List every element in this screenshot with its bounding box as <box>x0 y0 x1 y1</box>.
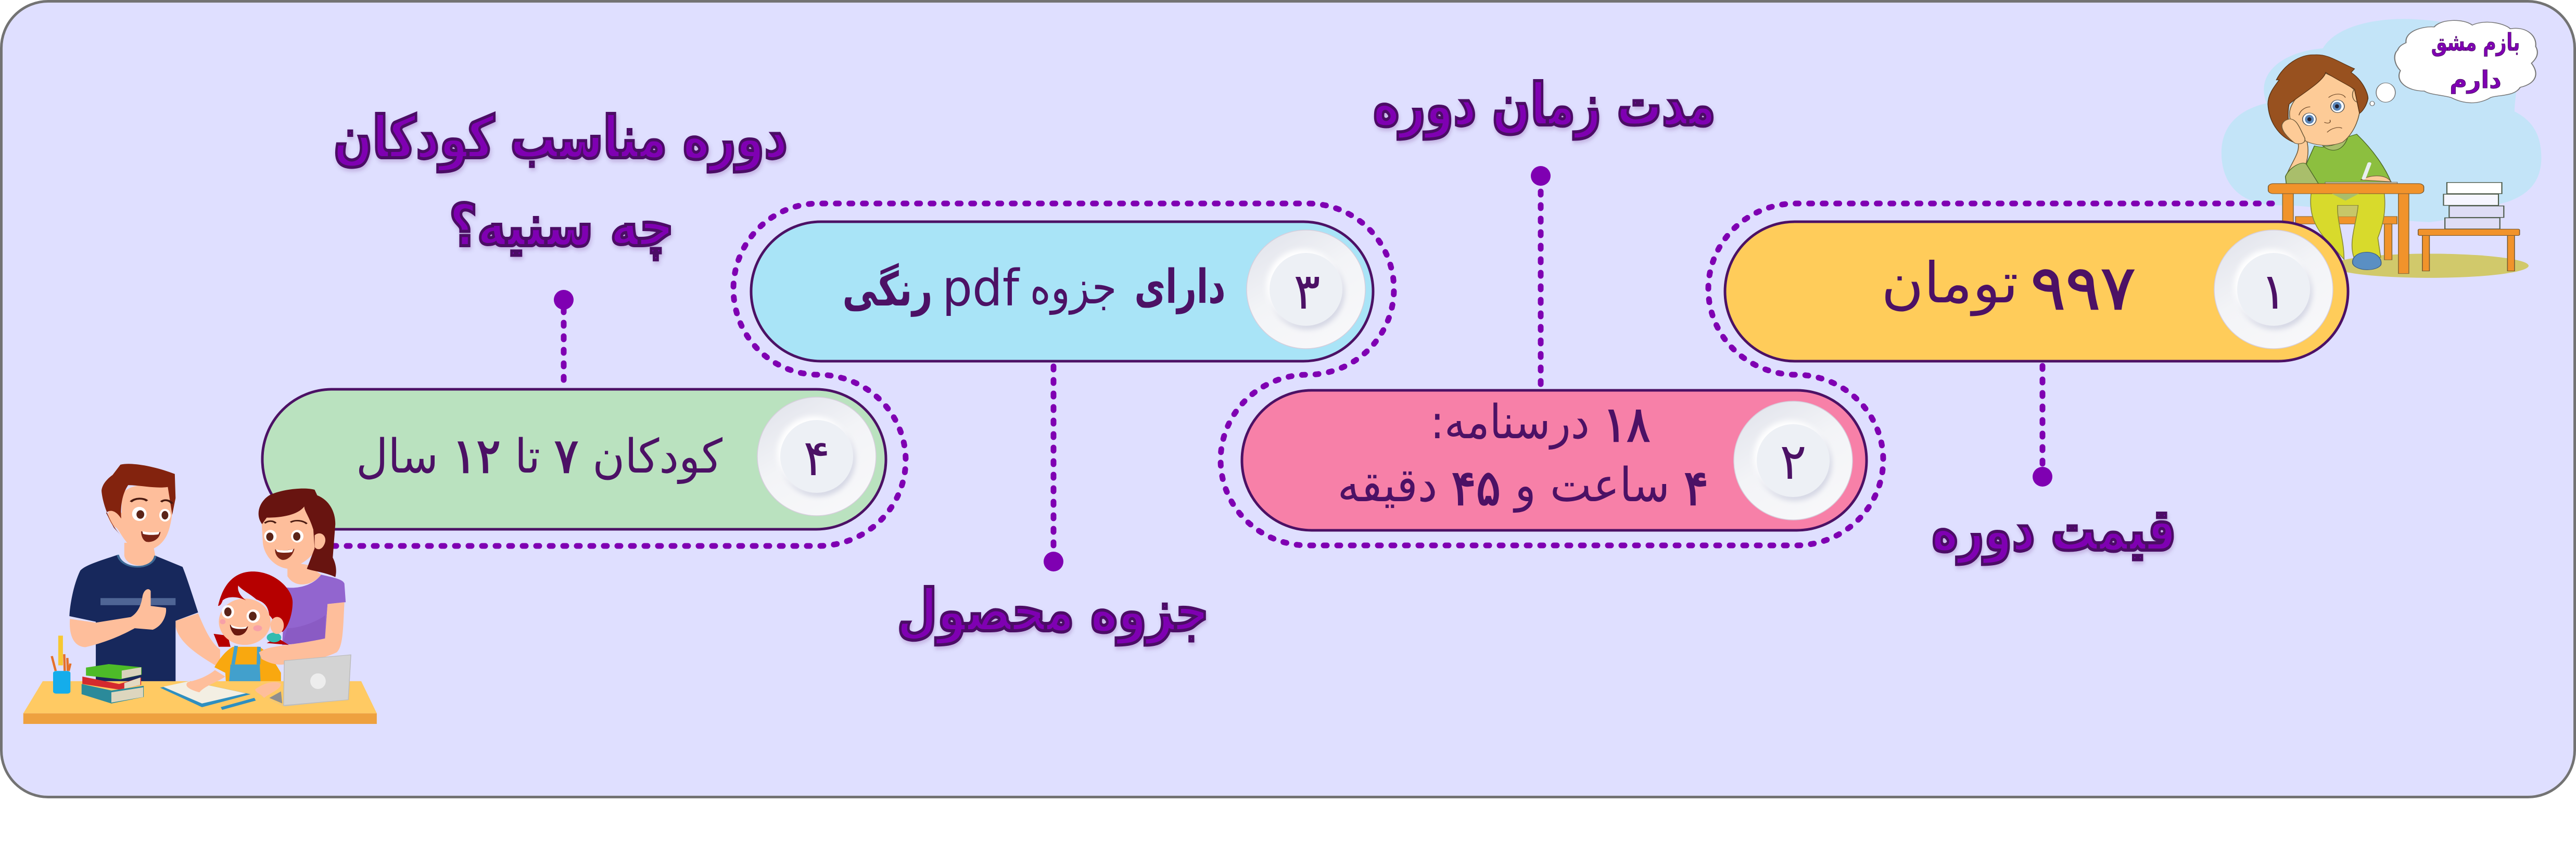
girl overalls <box>229 665 260 681</box>
heading: duration: مدت زمان دوره <box>1373 71 1716 139</box>
ground shadow <box>2331 253 2529 278</box>
paper <box>2325 182 2397 184</box>
girl hand on table <box>255 682 281 698</box>
duration text: ۴ <box>1684 459 1708 517</box>
price unit: تومان <box>1881 250 2019 316</box>
age text: کودکان ۷ تا ۱۲ سال <box>356 429 722 485</box>
connector: pill 2 to duration heading <box>1531 166 1551 384</box>
booklet text: دارای <box>1134 259 1226 314</box>
man eyes <box>132 507 147 521</box>
duration text: ۴۵ <box>1451 459 1501 517</box>
plate 1 <box>2214 230 2333 349</box>
panel: pill 2 duration <box>1242 390 1867 530</box>
thought cloud text: بازم مشق <box>2431 28 2520 57</box>
girl face <box>219 598 271 645</box>
blue cloud backdrop <box>2222 19 2541 222</box>
connector: pill 1 to price heading <box>2033 366 2052 487</box>
pants <box>2311 194 2385 259</box>
woman eyes <box>264 530 276 542</box>
heading: booklet: جزوه محصول <box>897 577 1209 645</box>
girl mouth <box>230 625 248 635</box>
open book <box>160 681 251 707</box>
man arms <box>175 614 220 668</box>
arm on cheek <box>2286 120 2308 175</box>
chair seat behind legs <box>2337 206 2359 216</box>
hair tie <box>267 633 281 642</box>
plate 4 <box>757 397 876 516</box>
side table <box>2418 229 2520 271</box>
heading: suitable age question: دوره مناسب کودکان <box>334 104 788 172</box>
woman arm and neck <box>287 562 321 584</box>
hair <box>2268 55 2368 142</box>
table top <box>2268 184 2424 194</box>
shirt <box>2306 134 2391 184</box>
man thumbs up arm <box>70 589 166 647</box>
collar <box>2323 136 2347 150</box>
pencil cup <box>58 635 63 666</box>
woman arm <box>260 602 345 665</box>
girl hair <box>218 571 293 632</box>
sleeve <box>2286 163 2319 184</box>
laptop <box>284 655 351 705</box>
heading: price: قیمت دوره <box>1932 496 2176 565</box>
books <box>82 684 144 704</box>
lessons count: ۱۸ <box>1603 397 1650 453</box>
connector: pill 3 to booklet heading <box>1044 366 1063 571</box>
table legs <box>2282 193 2409 274</box>
heading: suitable age question: چه سنیه؟ <box>449 193 674 260</box>
booklet text: رنگی <box>842 262 933 316</box>
table <box>23 681 377 714</box>
number 3: ۳ <box>1293 262 1321 321</box>
girl arm <box>186 670 225 692</box>
illustration: family at table <box>23 464 377 724</box>
girl eyes <box>222 605 234 619</box>
woman hand <box>259 646 287 665</box>
panel: pill 4 age <box>262 389 886 529</box>
girl cheeks <box>220 619 225 625</box>
pen <box>2364 163 2369 179</box>
brows, nose and mouth <box>2299 94 2345 132</box>
shoe <box>2353 252 2381 270</box>
woman shirt <box>282 575 346 645</box>
girl ear <box>270 617 284 634</box>
lessons count: درسنامه: <box>1430 396 1603 450</box>
booklet text <box>842 259 1226 318</box>
duration text: ساعت و <box>1501 458 1684 513</box>
dotted outline path around the pills <box>333 203 2272 546</box>
man brows <box>131 499 172 504</box>
connector: pill 4 to age heading <box>554 290 574 388</box>
plate 2 <box>1734 401 1852 520</box>
chair <box>2295 216 2397 260</box>
panel: pill 1 price <box>1725 222 2348 361</box>
booklet text: pdf <box>942 260 1020 318</box>
thought cloud text: دارم <box>2450 66 2502 94</box>
man shirt <box>69 555 198 681</box>
price value: ۹۹۷ <box>2031 252 2136 324</box>
girl pigtails <box>213 634 289 647</box>
hand <box>2361 176 2391 182</box>
thought bubbles <box>2370 83 2395 106</box>
duration text: دقیقه <box>1338 458 1451 513</box>
panel: pill 3 booklet <box>751 222 1373 361</box>
man hair <box>101 464 175 535</box>
eyes <box>2303 113 2316 125</box>
woman face <box>261 506 326 569</box>
thought cloud text <box>2431 28 2520 94</box>
booklet text: جزوه <box>1030 260 1116 315</box>
number 1: ۱ <box>2260 262 2287 321</box>
man face <box>108 485 173 551</box>
illustration: boy at desk with thought bubble <box>2222 19 2541 278</box>
number 4: ۴ <box>803 429 830 487</box>
thought cloud <box>2395 20 2537 103</box>
pencil <box>221 699 255 708</box>
man mouth <box>141 531 160 542</box>
hand on cheek <box>2282 119 2305 144</box>
heading: suitable age question <box>334 104 788 260</box>
face <box>2290 73 2360 145</box>
stacked books <box>2443 183 2504 229</box>
plate 3 <box>1247 230 1365 349</box>
woman mouth <box>275 549 295 560</box>
man neck <box>124 543 155 566</box>
ear <box>2353 87 2364 102</box>
shirt hem <box>2332 194 2359 201</box>
woman brows <box>264 520 307 524</box>
woman hair <box>259 489 336 577</box>
girl body <box>214 647 281 681</box>
number 2: ۲ <box>1780 432 1807 491</box>
